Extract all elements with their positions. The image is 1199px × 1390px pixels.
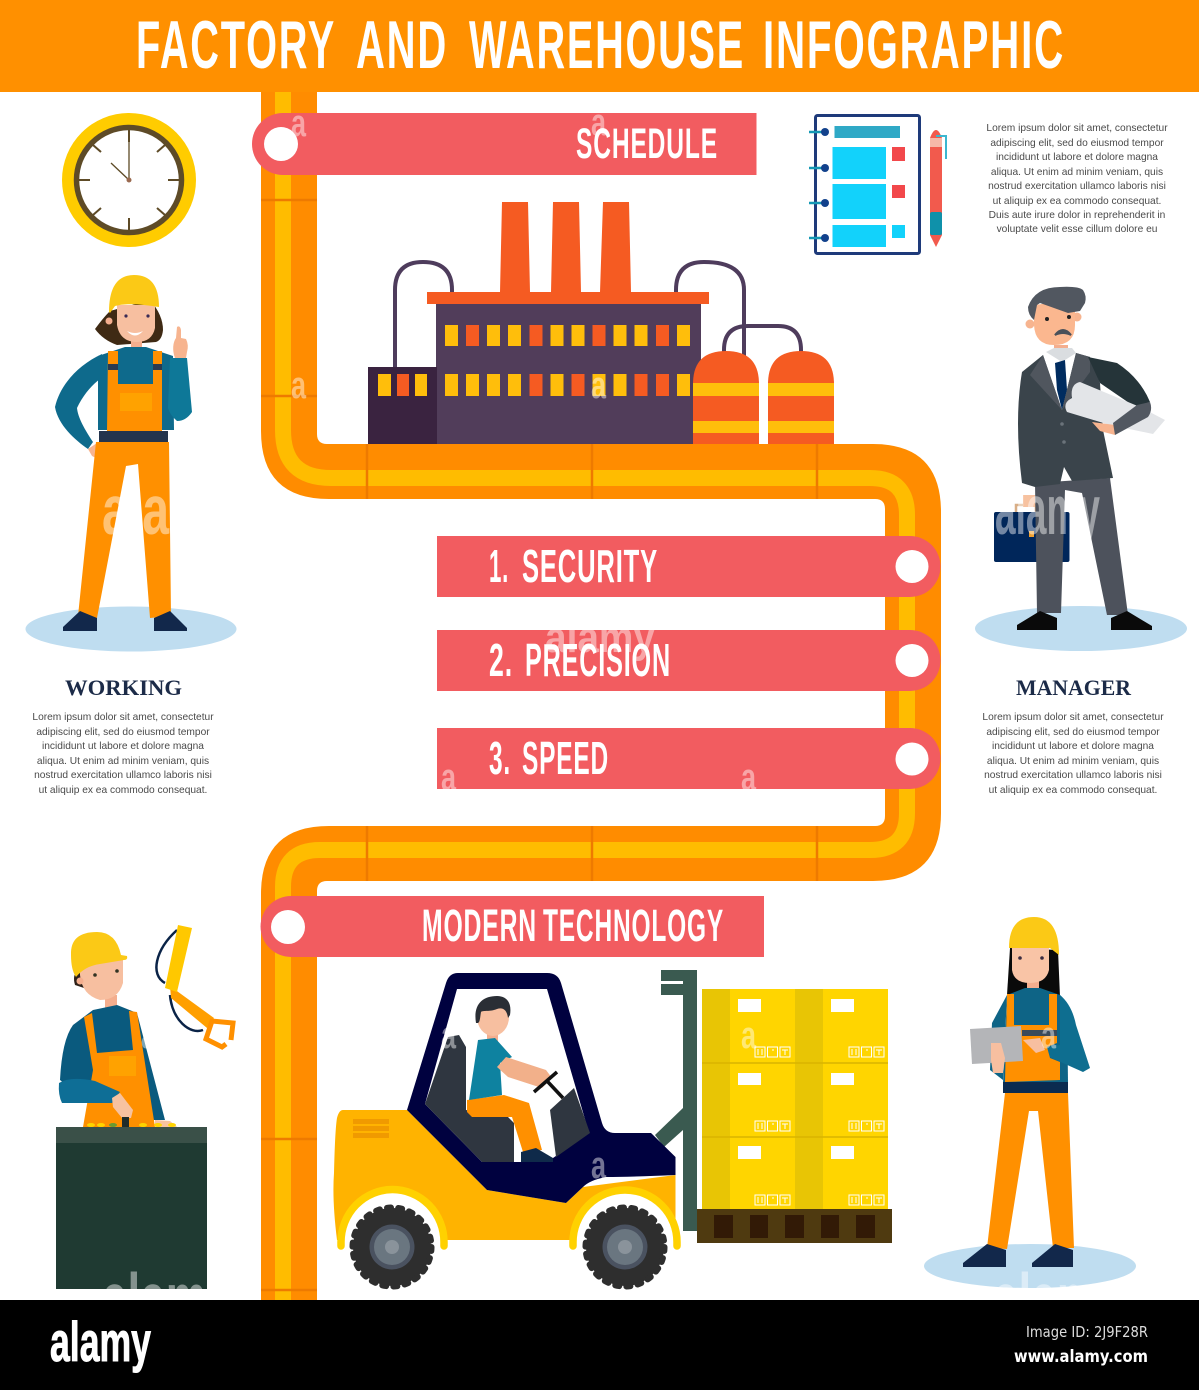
website: www.alamy.com <box>1014 1347 1148 1367</box>
label: 1. security: 1. <box>489 540 509 592</box>
text block: working copy: ut aliquip ex ea commodo consequat. <box>39 785 207 796</box>
header banner <box>0 0 1199 92</box>
watermarks: alam <box>102 471 212 549</box>
wheel arches <box>341 1190 677 1246</box>
label: 3. speed: SPEED <box>522 732 609 784</box>
icon: notebook and pen <box>809 116 946 254</box>
text block: working copy: nostrud exercitation ullamco laboris nisi <box>34 770 212 781</box>
watermarks: a <box>741 1015 757 1057</box>
watermarks: a <box>441 1015 457 1057</box>
watermarks: a <box>591 102 607 144</box>
title <box>136 7 1065 83</box>
text block: manager copy: Lorem ipsum dolor sit amet, consectetur <box>982 712 1164 723</box>
text block: schedule copy: incididunt ut labore et dolore magna <box>996 152 1158 163</box>
storage tanks <box>693 351 834 444</box>
text block: schedule copy: aliqua. Ut enim ad minim veniam, quis <box>991 167 1163 178</box>
text block: schedule copy: nostrud exercitation ullamco laboris nisi <box>988 181 1166 192</box>
text block: schedule copy: adipiscing elit, sed do eiusmod tempor <box>990 138 1164 149</box>
watermarks: alamy <box>993 1259 1123 1337</box>
footer logo: alamy <box>50 1310 151 1373</box>
watermarks: a <box>141 1015 157 1057</box>
text block: working copy: Lorem ipsum dolor sit amet, consectetur <box>32 712 214 723</box>
rolled blueprints <box>1065 382 1165 434</box>
wheel: front <box>586 1208 664 1286</box>
text block: schedule copy: Duis aute irure dolor in reprehenderit in <box>989 210 1165 221</box>
forklift cab <box>407 973 676 1203</box>
text block: schedule copy: voluptate velit esse cillum dolore eu <box>997 224 1157 235</box>
text block: manager copy: nostrud exercitation ullamco laboris nisi <box>984 770 1162 781</box>
text block: manager copy: aliqua. Ut enim ad minim veniam, quis <box>987 756 1159 767</box>
watermarks: a <box>591 365 607 407</box>
label: 2. precision: PRECISION <box>525 634 671 686</box>
forklift mast <box>655 970 697 1231</box>
watermarks: a <box>741 757 757 799</box>
factory windows <box>378 325 690 396</box>
forklift driver <box>467 996 563 1162</box>
label: modern technology: TECHNOLOGY <box>543 900 724 951</box>
heading: working: WORKING <box>65 675 182 700</box>
label: 3. speed: 3. <box>489 732 511 784</box>
title: AND <box>356 7 448 83</box>
text block: schedule copy <box>986 123 1168 235</box>
label: 2. precision <box>437 630 940 691</box>
illustration: forklift with pallet <box>333 970 892 1286</box>
watermarks: a <box>291 103 307 145</box>
text block: working copy <box>32 712 214 796</box>
watermarks: a <box>291 365 307 407</box>
image id: Image ID: 2J9F28R <box>1026 1323 1148 1341</box>
character: manager <box>975 287 1187 651</box>
character: control panel operator <box>56 932 207 1289</box>
watermarks: a <box>441 757 457 799</box>
text block: manager copy: incididunt ut labore et dolore magna <box>992 741 1154 752</box>
watermarks <box>102 102 1123 1337</box>
text block: manager copy: ut aliquip ex ea commodo consequat. <box>989 785 1157 796</box>
tablet <box>970 1026 1023 1064</box>
label: 3. speed <box>437 728 940 789</box>
control console <box>56 1127 207 1289</box>
watermarks: a <box>591 1145 607 1187</box>
title: FACTORY <box>136 7 336 83</box>
pallet of boxes <box>697 989 892 1243</box>
text block: working copy: incididunt ut labore et dolore magna <box>42 741 204 752</box>
watermarks: a <box>1041 1015 1057 1057</box>
label: 1. security <box>437 536 940 597</box>
label: 2. precision: 2. <box>489 634 513 686</box>
text block: manager copy <box>982 712 1164 796</box>
briefcase <box>994 505 1070 562</box>
title: WAREHOUSE <box>469 7 745 83</box>
label: 1. security: SECURITY <box>522 540 658 592</box>
forklift body <box>333 1110 676 1240</box>
label: schedule <box>252 113 756 175</box>
icon: robotic arm <box>156 925 233 1047</box>
process pipeline <box>261 92 941 1300</box>
label: schedule: SCHEDULE <box>576 120 718 168</box>
text block: working copy: adipiscing elit, sed do eiusmod tempor <box>36 727 210 738</box>
watermarks: alamy <box>545 613 655 662</box>
wheel: rear <box>352 1208 432 1286</box>
watermarks: alamy <box>102 1259 232 1337</box>
text block: manager copy: adipiscing elit, sed do eiusmod tempor <box>986 727 1160 738</box>
character: female worker <box>26 275 236 652</box>
illustration: factory <box>368 202 834 444</box>
footer bar <box>0 1300 1199 1390</box>
text block: working copy: aliqua. Ut enim ad minim veniam, quis <box>37 756 209 767</box>
heading: manager: MANAGER <box>1016 675 1132 700</box>
label: modern technology <box>261 896 764 957</box>
character: worker with tablet <box>924 917 1136 1288</box>
text block: schedule copy: Lorem ipsum dolor sit amet, consectetur <box>986 123 1168 134</box>
label: modern technology: MODERN <box>422 900 537 951</box>
watermarks: alamy <box>995 471 1100 549</box>
icon: wall clock <box>62 113 196 247</box>
pen <box>930 130 946 247</box>
text block: schedule copy: ut aliquip ex ea commodo consequat. <box>993 196 1161 207</box>
